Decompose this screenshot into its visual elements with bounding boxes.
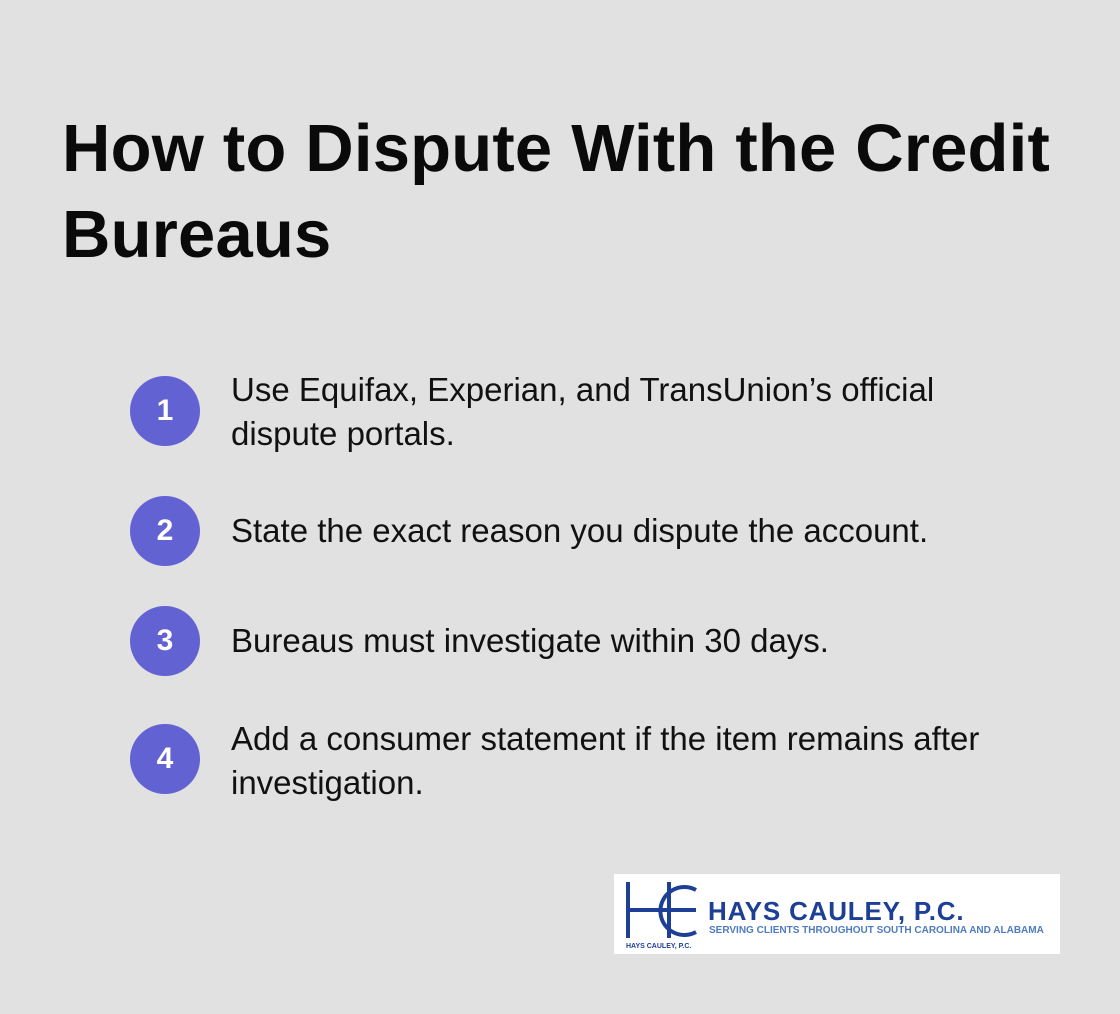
title: How to Dispute With the Credit — [62, 111, 1050, 186]
logo name: HAYS CAULEY, P.C. — [708, 896, 964, 926]
logo mark — [626, 882, 697, 938]
text 1: dispute portals. — [231, 415, 455, 452]
badge 3 — [130, 606, 200, 676]
title: Bureaus — [62, 197, 332, 272]
step 1 — [130, 371, 934, 452]
badge 2 — [130, 496, 200, 566]
text 3: Bureaus must investigate within 30 days. — [231, 622, 829, 659]
badge 4: 4 — [157, 742, 173, 775]
badge 2: 2 — [157, 514, 173, 547]
logo tagline: SERVING CLIENTS THROUGHOUT SOUTH CAROLINA AND ALABAMA — [709, 925, 1044, 936]
logo: HAYS CAULEY, P.C. — [626, 943, 691, 950]
text 1 — [231, 371, 934, 452]
text 4 — [231, 720, 979, 801]
text 4: Add a consumer statement if the item remains after — [231, 720, 979, 757]
text 2: State the exact reason you dispute the account. — [231, 512, 928, 549]
step 3 — [130, 606, 829, 676]
badge 4 — [130, 724, 200, 794]
badge 1: 1 — [157, 394, 173, 427]
title — [62, 111, 1050, 272]
text 1: Use Equifax, Experian, and TransUnion’s official — [231, 371, 934, 408]
text 4: investigation. — [231, 764, 424, 801]
logo — [614, 874, 1060, 954]
step 4 — [130, 720, 979, 801]
badge 1 — [130, 376, 200, 446]
badge 3: 3 — [157, 624, 173, 657]
step 2 — [130, 496, 928, 566]
